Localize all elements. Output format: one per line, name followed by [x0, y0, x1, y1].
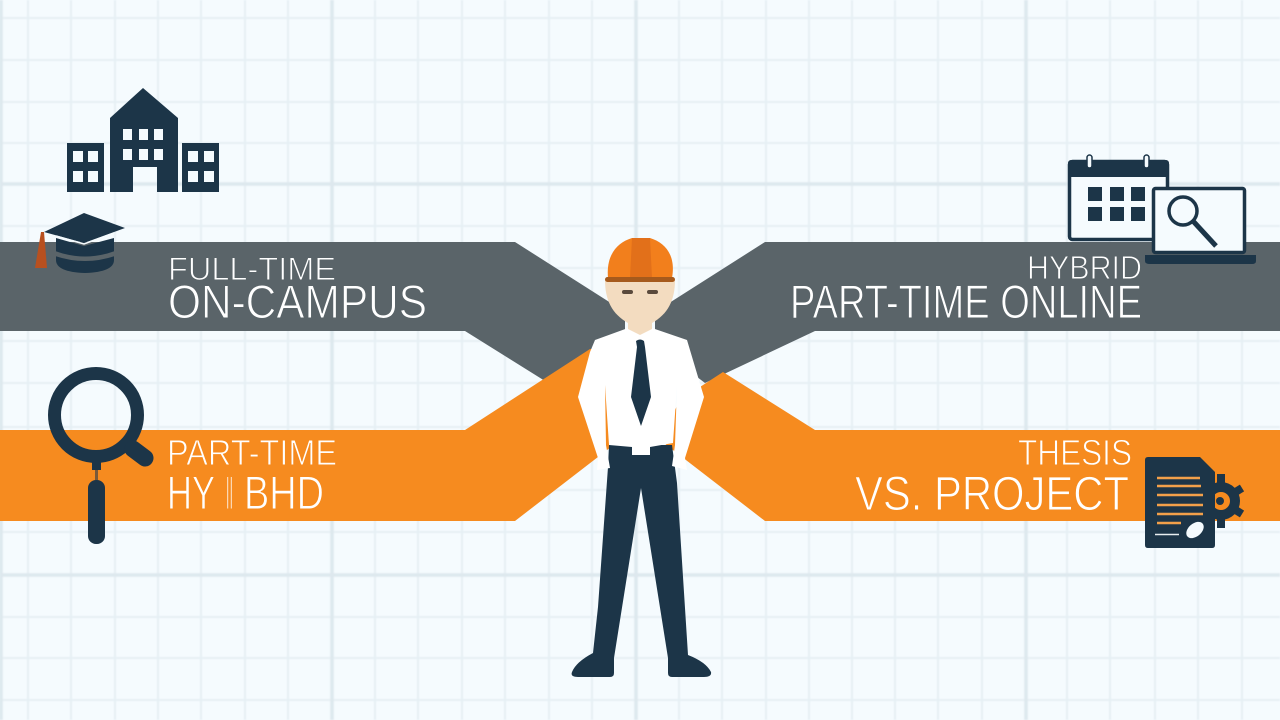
- figure: engineer in hard hat: [572, 238, 711, 677]
- necktie: [631, 340, 651, 426]
- band: thesis vs project: [660, 372, 1280, 521]
- trousers and shoes: [572, 445, 711, 677]
- label: part-time hybrid: [167, 432, 337, 519]
- white shirt: [578, 328, 704, 470]
- label: full-time on-campus: FULL-TIME: [168, 251, 336, 287]
- icon: graduation cap: [35, 213, 125, 273]
- label: part-time hybrid: BHD: [244, 466, 324, 519]
- label: part-time hybrid: II: [226, 466, 233, 519]
- icon: thesis document and gear: [1145, 457, 1242, 548]
- label: thesis vs project: VS. PROJECT: [855, 468, 1129, 521]
- label: part-time hybrid: PART-TIME: [167, 432, 337, 473]
- label: hybrid part-time online: PART-TIME ONLINE: [790, 275, 1142, 328]
- head: [605, 280, 675, 326]
- hard hat: [605, 238, 675, 282]
- label: part-time hybrid: HY: [167, 466, 215, 519]
- label: full-time on-campus: ON-CAMPUS: [168, 275, 427, 328]
- icon: campus buildings: [67, 88, 219, 192]
- label: hybrid part-time online: HYBRID: [1027, 249, 1142, 286]
- band: full-time on-campus: [0, 242, 625, 381]
- neck: [628, 318, 652, 335]
- band: hybrid part-time online: [655, 242, 1280, 383]
- label: hybrid part-time online: [790, 249, 1142, 328]
- icon: calendar and laptop search: [1068, 155, 1256, 264]
- label: full-time on-campus: [168, 251, 427, 328]
- icon: magnifying glass: [54, 374, 145, 544]
- label: thesis vs project: THESIS: [1018, 432, 1132, 473]
- eyes: [622, 290, 658, 294]
- band: part-time hybrid: [0, 349, 620, 521]
- label: thesis vs project: [855, 432, 1132, 521]
